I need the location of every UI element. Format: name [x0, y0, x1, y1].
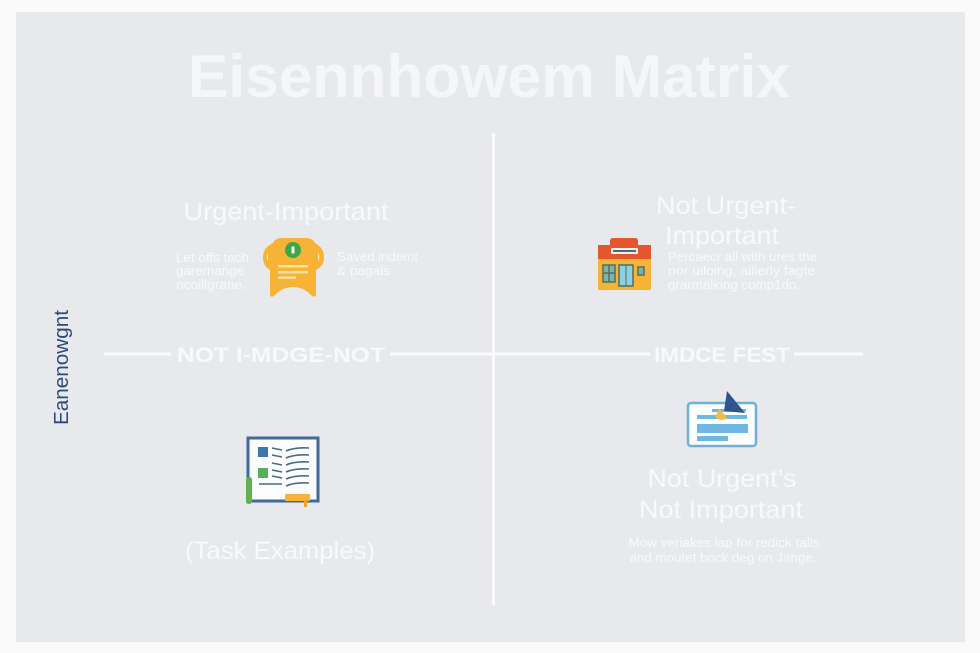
icon: card with flag: [688, 391, 756, 446]
text block: left: ncoillgrane.: [176, 278, 246, 292]
heading: Not Urgent’s: [648, 465, 796, 493]
text block: right: Saved indemt: [337, 250, 419, 264]
heading: Not Urgent-: [656, 192, 796, 220]
text block: left: garernange: [176, 264, 244, 278]
text block: grarmalking comp1do.: [668, 278, 800, 292]
vertical axis label: Eanenowgnt: [51, 310, 73, 425]
text block: left: [176, 251, 249, 292]
heading: (Task Examples): [185, 537, 375, 565]
horizontal axis: left: [104, 352, 863, 356]
panel: urgent-important: [176, 198, 419, 297]
text block: [668, 250, 817, 292]
vertical axis line: [492, 133, 495, 605]
panel: task examples: [185, 438, 375, 565]
axis label: right: IMDCE FEST: [654, 344, 790, 367]
icon: open book: [246, 438, 318, 507]
title: Eisennhowem Matrix: [188, 43, 790, 110]
text block: and moutet bock deg on Jange.: [630, 551, 816, 565]
icon: shop building: [598, 238, 651, 290]
text block: nor uiloing, ailierly fagte: [668, 264, 815, 278]
text block: [628, 536, 820, 565]
heading: Important: [665, 222, 779, 250]
text block: Percaecr all with ures the: [668, 250, 817, 264]
panel: not urgent-important: [598, 192, 817, 292]
heading: [656, 192, 796, 250]
axis label: left: NOT I-MDGE-NOT: [177, 344, 385, 367]
heading: [639, 465, 803, 524]
heading: Urgent-Important: [184, 198, 389, 226]
text block: right: & pagals: [337, 264, 390, 278]
panel: not urgent not important: [628, 391, 820, 565]
text block: right: [337, 250, 419, 278]
icon: orange document badge: [263, 238, 324, 297]
heading: Not Important: [639, 496, 803, 524]
text block: Mow veriakes lap for redick talls: [628, 536, 820, 550]
text block: left: Let offs tach: [176, 251, 249, 265]
